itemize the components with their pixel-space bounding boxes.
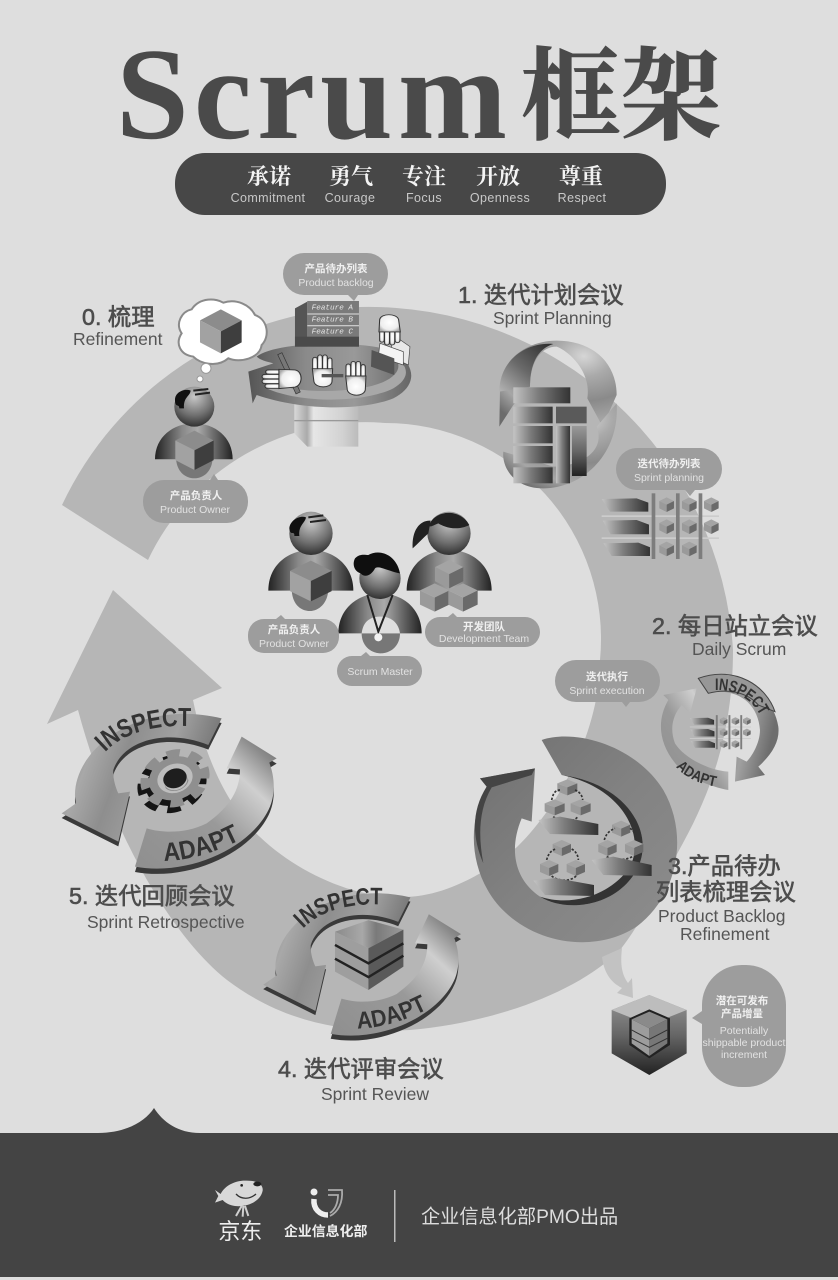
increment cube icon	[612, 995, 687, 1075]
values pill	[175, 153, 666, 215]
step 4 heading: Sprint Review	[321, 1084, 429, 1104]
step 1 heading: 1. 迭代计划会议	[458, 282, 624, 308]
sprint backlog label: 迭代待办列表	[638, 457, 701, 470]
step 3 heading: Refinement	[680, 924, 770, 944]
backlog bars	[513, 387, 587, 483]
product backlog platform icon	[248, 301, 411, 447]
central scrum master label: Scrum Master	[347, 666, 413, 678]
hand above cards	[379, 315, 400, 345]
sprint backlog grid icon	[602, 493, 719, 559]
value: courage: 勇气	[329, 160, 373, 191]
gear	[135, 745, 212, 818]
footer logo: enterprise informatization department: 企业信息化部	[284, 1223, 367, 1239]
step 3 heading	[656, 853, 796, 944]
value: respect	[558, 160, 606, 205]
value: openness: Openness	[470, 191, 530, 205]
inspect text: INSPECT	[94, 708, 191, 752]
value: respect: Respect	[558, 191, 606, 205]
feature stack: Feature A	[312, 305, 353, 313]
increment block	[335, 920, 403, 990]
potentially shippable label: 产品增量	[721, 1007, 763, 1020]
sprint cycle band arrow	[47, 307, 733, 1031]
hands	[312, 355, 333, 387]
feature stack: Feature B	[312, 317, 353, 325]
adapt text: ADAPT	[358, 994, 424, 1029]
step 5 heading: Sprint Retrospective	[87, 912, 245, 932]
step 5 heading	[69, 883, 245, 932]
value: focus	[402, 160, 446, 205]
footer credit: 企业信息化部PMO出品	[421, 1206, 618, 1228]
value: focus: Focus	[406, 191, 442, 205]
potentially shippable label	[692, 965, 786, 1087]
sprint planning icon	[499, 341, 617, 488]
backlog marker strip	[322, 374, 343, 377]
product owner label	[143, 474, 248, 523]
value: respect: 尊重	[559, 160, 603, 191]
step 4 heading: 4. 迭代评审会议	[278, 1056, 444, 1082]
stack column	[294, 347, 358, 383]
product owner label: 产品负责人	[170, 489, 223, 502]
central product owner figure	[268, 512, 353, 611]
step 1 heading	[458, 282, 624, 328]
title: 框架	[521, 16, 721, 160]
footer logo: JD mascot: 京东	[218, 1219, 262, 1244]
footer divider	[394, 1190, 396, 1242]
value: commitment: 承诺	[247, 160, 291, 191]
value: openness: 开放	[476, 160, 520, 191]
central development team label: Development Team	[439, 633, 529, 645]
step 3 heading: 3.产品待办	[668, 853, 781, 879]
step 3 heading: 列表梳理会议	[656, 879, 796, 905]
central product owner label: 产品负责人	[268, 623, 321, 636]
step 0 heading	[73, 304, 163, 349]
step 5 retrospective cycle icon	[62, 708, 276, 874]
footer band	[0, 1108, 838, 1277]
product backlog label: Product backlog	[298, 277, 374, 289]
thought cloud	[179, 299, 267, 382]
product backlog label: 产品待办列表	[304, 262, 368, 275]
rotating platform arrow	[248, 344, 411, 407]
central scrum master label	[337, 652, 422, 686]
inspect text: INSPECT	[292, 888, 382, 928]
value: courage: Courage	[325, 191, 375, 205]
value: focus: 专注	[402, 160, 446, 191]
potentially shippable label: shippable product	[703, 1037, 786, 1049]
sprint execution label: 迭代执行	[586, 670, 628, 683]
sprint backlog label: Sprint planning	[634, 472, 704, 484]
step 1 heading: Sprint Planning	[493, 308, 612, 328]
step 5 heading: 5. 迭代回顾会议	[69, 883, 235, 909]
daily scrum cycle icon	[661, 674, 778, 790]
column base	[294, 403, 358, 447]
value: commitment: Commitment	[231, 191, 306, 205]
adapt text: ADAPT	[676, 762, 718, 786]
central product owner label	[248, 615, 339, 653]
feature stack: Feature C	[312, 329, 353, 337]
adapt text: ADAPT	[164, 824, 236, 861]
step 2 heading: Daily Scrum	[692, 639, 786, 659]
refinement clusters	[533, 779, 652, 896]
step 2 heading: 2. 每日站立会议	[652, 613, 818, 639]
footer logo: enterprise informatization department	[284, 1188, 367, 1239]
central product owner label: Product Owner	[259, 638, 330, 650]
value: openness	[470, 160, 530, 205]
product owner figure	[155, 387, 233, 478]
title	[116, 16, 721, 167]
potentially shippable label: 潜在可发布	[716, 994, 768, 1007]
central development team figure	[407, 512, 492, 612]
step 4 review cycle icon	[263, 888, 461, 1040]
central scrum master figure	[338, 552, 422, 653]
potentially shippable label: Potentially	[720, 1025, 769, 1037]
central development team label: 开发团队	[463, 620, 505, 633]
title: Scrum	[116, 22, 507, 167]
cards	[371, 335, 410, 375]
hand with pen	[262, 353, 301, 394]
central development team label	[425, 613, 540, 647]
step 0 heading: Refinement	[73, 329, 163, 349]
sprint backlog label	[616, 448, 722, 496]
mini backlog	[690, 715, 751, 749]
value: commitment	[231, 160, 306, 205]
sprint execution label: Sprint execution	[569, 685, 645, 697]
hand	[346, 361, 366, 395]
step 4 heading	[278, 1056, 444, 1104]
footer logo: JD mascot	[215, 1181, 263, 1244]
step 0 heading: 0. 梳理	[82, 304, 154, 330]
step 3 heading: Product Backlog	[658, 906, 785, 926]
step 2 heading	[652, 613, 818, 659]
value: courage	[325, 160, 375, 205]
sprint execution label	[555, 660, 660, 707]
product backlog label	[283, 253, 388, 301]
product owner label: Product Owner	[160, 504, 231, 516]
potentially shippable label: increment	[721, 1049, 767, 1061]
planning cycle arrows	[499, 341, 617, 488]
backlog refinement spiral arrow	[474, 737, 677, 942]
feature stack	[295, 301, 359, 347]
increment arrow	[602, 948, 633, 998]
inspect text: INSPECT	[716, 678, 770, 713]
